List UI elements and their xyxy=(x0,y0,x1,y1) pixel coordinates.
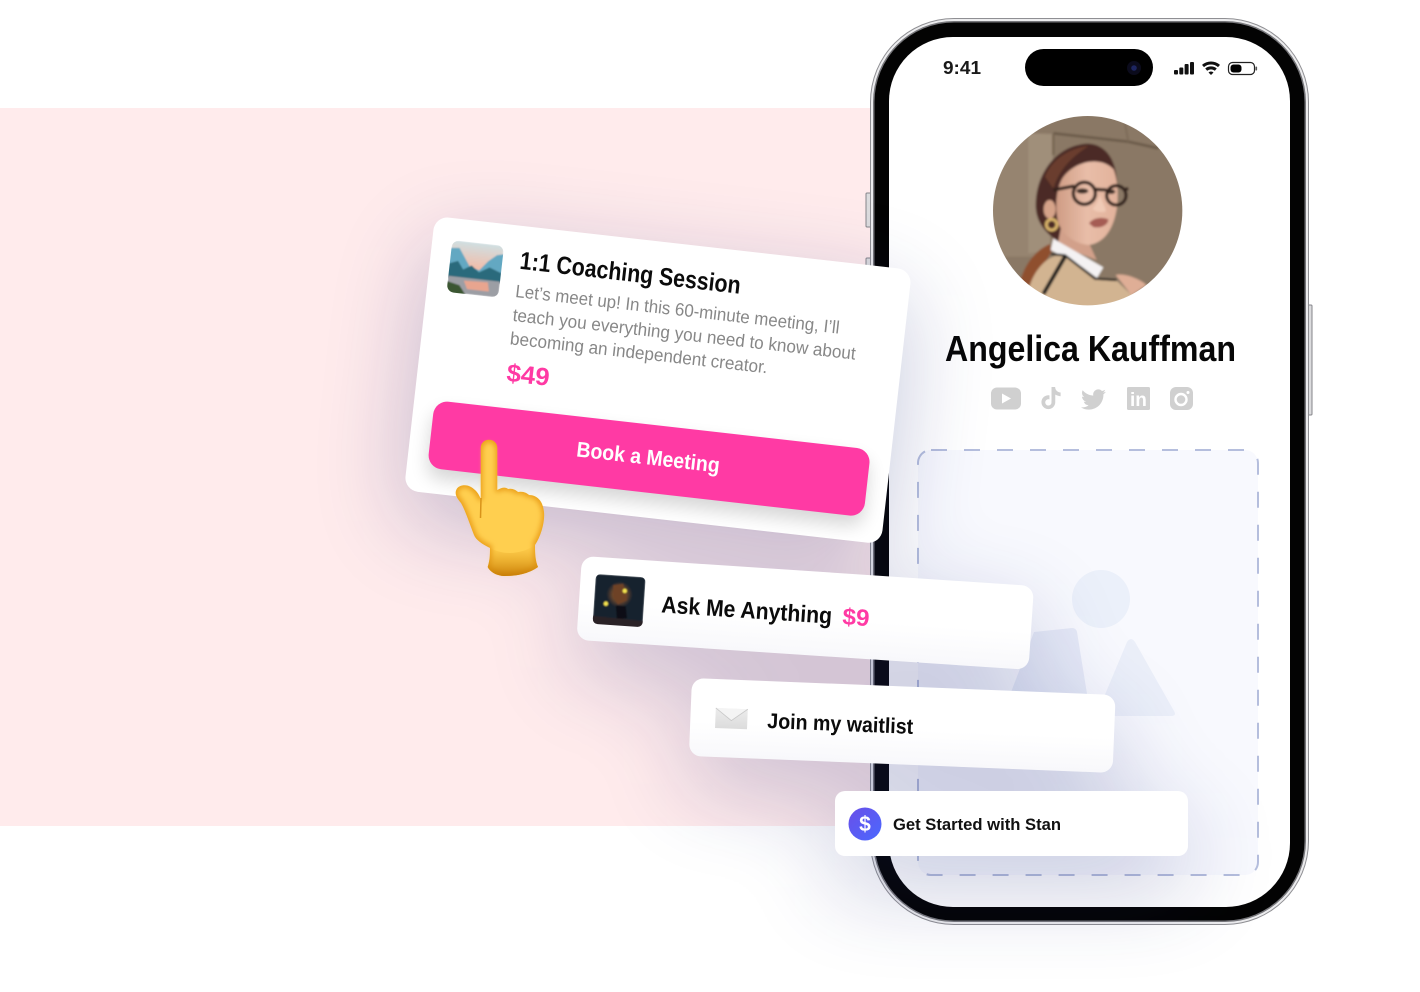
profile photo xyxy=(993,116,1182,306)
profile name: Angelica Kauffman xyxy=(945,328,1236,369)
phone screen xyxy=(889,37,1290,907)
coat xyxy=(1028,254,1132,306)
hair xyxy=(1036,144,1117,242)
placeholder picture glyph xyxy=(1008,570,1175,716)
book a meeting button xyxy=(427,400,871,517)
card: 1:1 coaching session xyxy=(404,216,912,544)
earring xyxy=(1046,219,1057,230)
pink background band xyxy=(0,108,880,826)
phone body xyxy=(870,18,1309,925)
card: ask me anything xyxy=(576,556,1034,670)
book a meeting button: Book a Meeting xyxy=(575,437,721,478)
thumbnail: mountain lake xyxy=(447,241,504,297)
lips xyxy=(1089,218,1108,227)
glasses xyxy=(1053,182,1128,205)
wifi icon xyxy=(1203,63,1219,75)
eyes xyxy=(1076,188,1088,194)
icon: tiktok xyxy=(1041,387,1061,409)
price: $9 xyxy=(842,603,870,631)
status bar xyxy=(943,49,1257,86)
nose highlight xyxy=(1093,197,1106,212)
social icons xyxy=(991,387,1193,411)
icon: youtube xyxy=(991,388,1021,410)
hand xyxy=(1116,275,1146,295)
icon: envelope xyxy=(715,708,748,729)
icon: pointing hand xyxy=(456,440,544,576)
icon: dollar badge xyxy=(848,808,882,840)
description: teach you everything you need to know about xyxy=(512,305,857,364)
description: Let’s meet up! In this 60-minute meeting, I’ll xyxy=(514,281,841,338)
card title: Ask Me Anything xyxy=(661,591,833,629)
card: get started with stan xyxy=(835,791,1188,856)
phone xyxy=(866,18,1312,925)
description: becoming an independent creator. xyxy=(509,328,769,377)
card title: 1:1 Coaching Session xyxy=(518,247,742,300)
signal icon xyxy=(1174,62,1194,74)
button label: Get Started with Stan xyxy=(893,815,1061,834)
face xyxy=(1056,161,1118,245)
ponytail xyxy=(1020,244,1052,286)
description xyxy=(509,281,860,387)
image placeholder xyxy=(918,450,1258,875)
neck xyxy=(1052,228,1098,260)
dynamic island xyxy=(1025,49,1153,86)
thumbnail: dark abstract xyxy=(592,574,646,627)
clock: 9:41 xyxy=(943,57,981,78)
icon: instagram xyxy=(1170,387,1193,410)
card: join my waitlist xyxy=(689,678,1116,773)
icon: linkedin: in xyxy=(1130,390,1147,411)
card shadows xyxy=(401,244,1188,887)
icon: linkedin xyxy=(1127,387,1150,411)
card title: Join my waitlist xyxy=(767,709,914,739)
collar xyxy=(1051,239,1103,278)
price: $49 xyxy=(505,359,551,392)
battery icon xyxy=(1228,62,1257,74)
icon: dollar badge: $ xyxy=(859,813,871,836)
ear xyxy=(1044,200,1056,219)
button shadow xyxy=(426,410,870,527)
icon: twitter xyxy=(1081,389,1106,410)
phone side buttons xyxy=(866,193,1312,415)
